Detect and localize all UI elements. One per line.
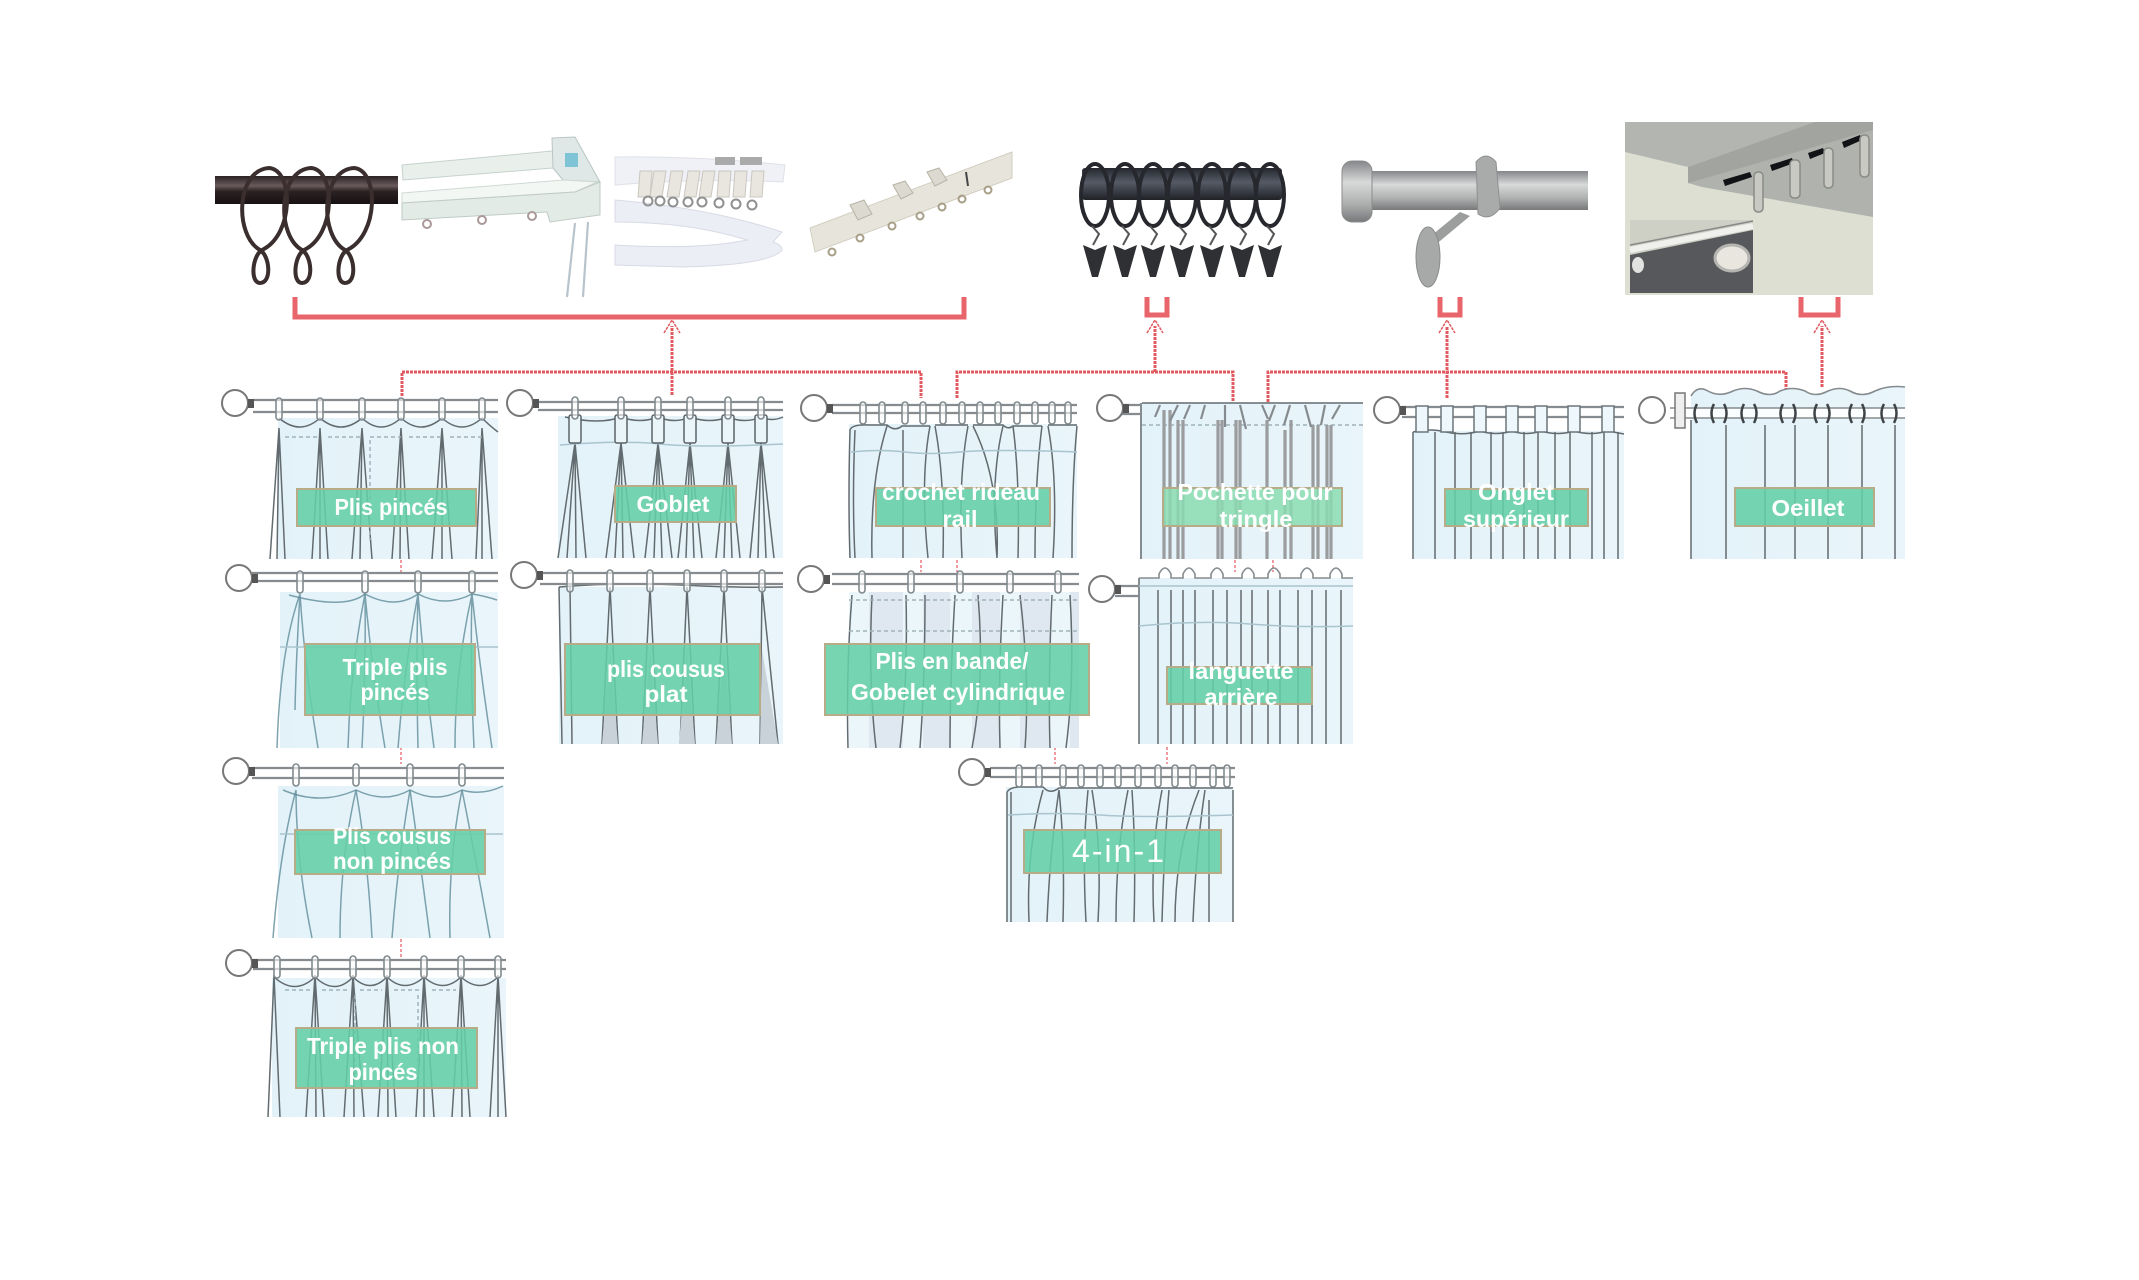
panel: Plis cousus non pincés xyxy=(223,758,504,938)
photo: rod with eyelet rings xyxy=(215,168,398,283)
panel: Plis pincés xyxy=(222,390,498,559)
label: Onglet supérieur: supérieur xyxy=(1463,506,1569,532)
label: Onglet supérieur: Onglet xyxy=(1478,479,1554,505)
curtain drawing xyxy=(1089,568,1353,744)
label: Triple plis pincés xyxy=(305,644,475,715)
label: Onglet supérieur xyxy=(1445,479,1588,532)
curtain drawing xyxy=(222,390,498,559)
label: Plis cousus non pincés: Plis cousus xyxy=(333,823,451,849)
label: Triple plis non pincés: pincés xyxy=(348,1059,418,1085)
label: languette arrière: arrière xyxy=(1204,684,1278,710)
label: Plis pincés: Plis pincés xyxy=(334,494,448,520)
curtain drawing xyxy=(959,759,1235,922)
photo: curved track with gliders xyxy=(615,157,785,267)
panel: Onglet supérieur xyxy=(1374,397,1624,559)
curtain drawing xyxy=(507,390,783,558)
curtain drawing xyxy=(223,758,504,938)
label: Goblet xyxy=(615,486,736,522)
curtain drawing xyxy=(226,950,506,1117)
curtain drawing xyxy=(1374,397,1624,559)
curtain drawing xyxy=(226,565,498,748)
label: Triple plis pincés: pincés xyxy=(360,679,430,705)
curtain drawing xyxy=(801,395,1077,558)
label: Plis cousus non pincés xyxy=(295,823,485,874)
photo: ceiling rail with hooks and eyelet inset xyxy=(1625,122,1873,295)
label: plis cousus plat: plat xyxy=(644,681,688,707)
photo: clip rings on dark rod xyxy=(1081,164,1284,277)
photo: brushed metal rod with bracket xyxy=(1342,156,1588,287)
connector: main bracket and arrows from curtains to hardware xyxy=(295,297,1838,957)
panel: crochet rideau rail xyxy=(801,395,1077,558)
curtain drawing xyxy=(798,566,1079,748)
panel: 4-in-1 xyxy=(959,759,1235,922)
label: Goblet: Goblet xyxy=(636,491,710,517)
label: Plis cousus non pincés: non pincés xyxy=(333,848,451,874)
panel: Plis en bande / Gobelet cylindrique xyxy=(798,566,1089,748)
label: crochet rideau rail xyxy=(876,479,1050,532)
label: Triple plis non pincés xyxy=(296,1028,477,1088)
panel: Oeillet xyxy=(1639,386,1905,559)
label: Plis en bande / Gobelet cylindrique: Plis en bande/ xyxy=(876,648,1029,674)
curtain drawing xyxy=(1639,386,1905,559)
label: Plis en bande / Gobelet cylindrique: Gobelet cylindrique xyxy=(851,679,1065,705)
label: 4-in-1: 4-in-1 xyxy=(1072,833,1164,869)
curtain drawing xyxy=(1097,395,1363,559)
label: Pochette pour tringle xyxy=(1163,479,1342,532)
panel: languette arrière xyxy=(1089,568,1353,744)
label: plis cousus plat xyxy=(565,644,760,715)
label: languette arrière xyxy=(1167,658,1312,710)
label: Triple plis pincés: Triple plis xyxy=(342,654,448,680)
label: Triple plis non pincés: Triple plis non xyxy=(307,1033,459,1059)
label: Pochette pour tringle: Pochette pour xyxy=(1178,479,1333,505)
label: Pochette pour tringle: tringle xyxy=(1220,506,1292,532)
label: plis cousus plat: plis cousus xyxy=(607,656,725,682)
panel: plis cousus plat xyxy=(511,562,783,744)
photo: ceiling track with cords xyxy=(402,137,600,297)
label: Plis en bande / Gobelet cylindrique xyxy=(825,644,1089,715)
photo: straight white track with sliders xyxy=(810,152,1012,256)
label: Oeillet xyxy=(1735,488,1874,526)
panel: Goblet xyxy=(507,390,783,558)
label: Plis pincés xyxy=(297,489,476,526)
label: languette arrière: languette xyxy=(1188,658,1294,684)
label: Oeillet: Oeillet xyxy=(1772,495,1845,521)
panel: Triple plis pincés xyxy=(226,565,498,748)
panel: Triple plis non pincés xyxy=(226,950,506,1117)
label: 4-in-1 xyxy=(1024,830,1221,873)
label: crochet rideau rail: crochet rideau xyxy=(882,479,1040,505)
label: crochet rideau rail: rail xyxy=(942,506,978,532)
panel: Pochette pour tringle xyxy=(1097,395,1363,559)
curtain drawing xyxy=(511,562,783,744)
